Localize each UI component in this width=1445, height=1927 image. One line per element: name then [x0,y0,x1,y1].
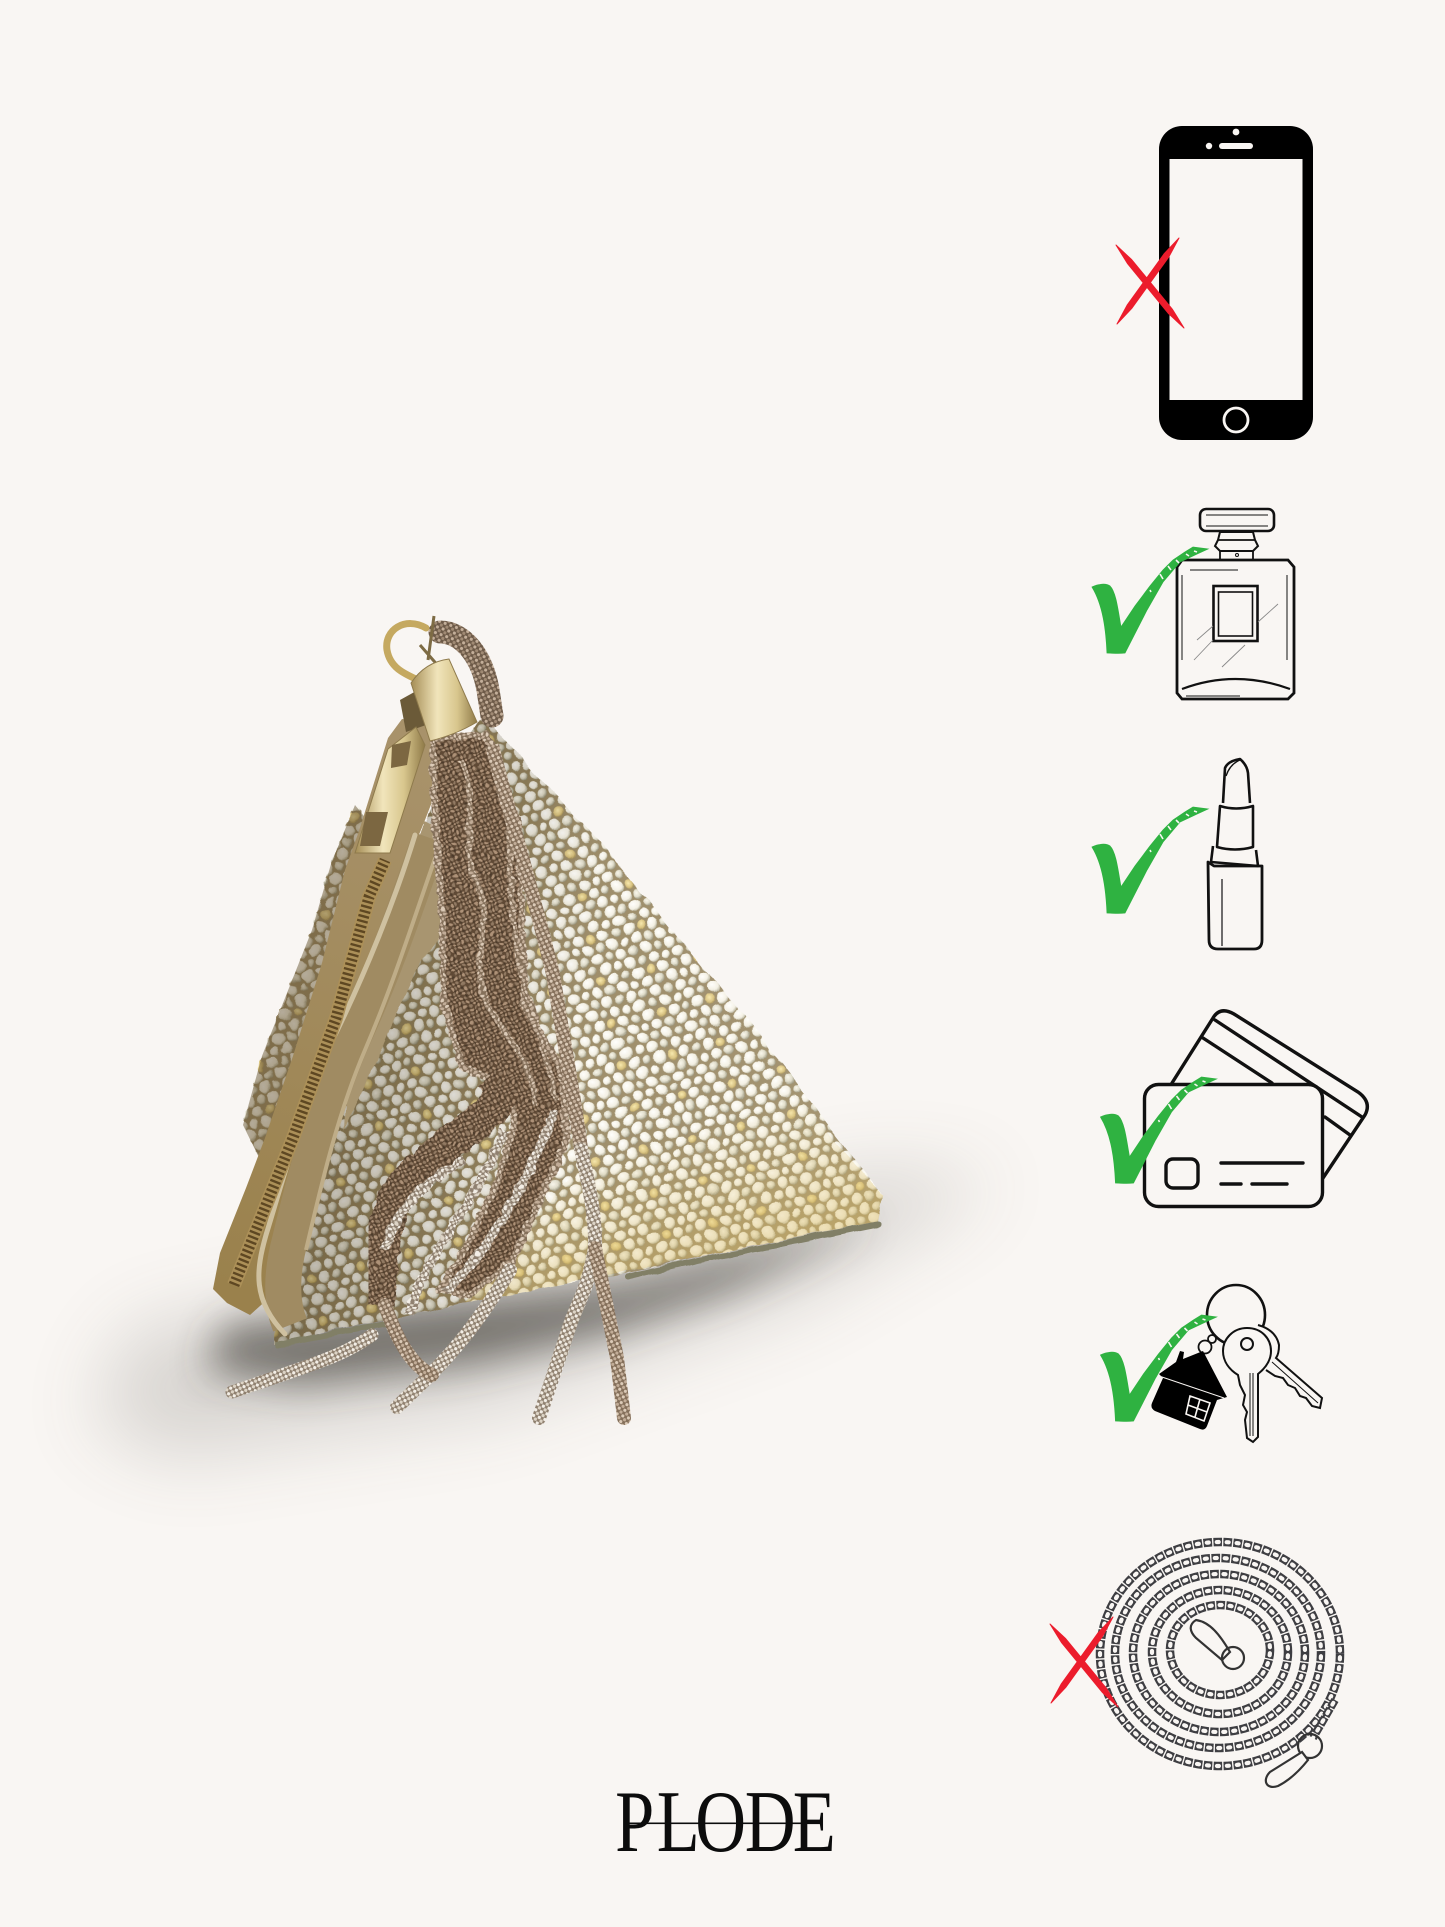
light strand two [410,1130,505,1315]
rope edge [259,835,415,1334]
house fob [1151,1351,1227,1430]
logo: PLODE: PLODE [615,1774,836,1871]
zipper pull tab [400,690,426,732]
bag drop shadow [90,1170,1000,1460]
green check: cards fit [1100,1077,1216,1183]
outer clasp [1266,1734,1322,1787]
house window [1159,1376,1224,1421]
tassel loop strand [385,1305,432,1375]
braid highlight one [460,760,535,1105]
icon: bank cards [1144,1011,1367,1206]
top rope loop [440,632,492,716]
crystal pyramid bag [213,616,883,1418]
gold ring [387,624,426,680]
braid highlight two [500,770,556,1100]
tassel middle strand [397,1270,510,1407]
back crystal sliver [243,805,375,1180]
green check: lipstick fits [1092,807,1208,913]
light strand one [385,1160,465,1250]
lower left braid [378,1075,499,1305]
back key [1258,1325,1322,1408]
red cross: chain not included [1050,1617,1118,1707]
front key groove [1250,1373,1253,1436]
plain velvet patch near zip [345,820,462,1130]
icon: perfume bottle [1177,509,1294,699]
back key groove [1272,1362,1318,1403]
icon: lipstick [1208,759,1262,949]
key hole [1241,1338,1253,1350]
light strand three [445,1110,555,1292]
velvet seam [283,838,430,1325]
front key [1223,1328,1271,1442]
red cross: phone not included [1116,238,1184,328]
green check: keys fit [1100,1315,1216,1421]
green check: perfume fits [1092,547,1208,653]
zipper pull [355,727,425,853]
zipper fabric [213,719,444,1315]
gold glow along base [463,1100,883,1303]
velvet outer light edge [306,850,438,1250]
face shading [274,716,883,1345]
gold ring hook [420,616,440,668]
key ring [1207,1285,1265,1345]
main upper braid and right braid [433,735,567,1295]
tassel left strand [232,1335,372,1392]
tassel braids [378,735,567,1315]
icon: phone [1159,126,1313,440]
tassel long strand two [595,1248,624,1418]
inner clasp [1191,1620,1244,1669]
chain tail [1313,1700,1335,1738]
tassel strand top [492,745,581,1149]
zipper teeth [234,860,385,1285]
icon: house keys [1151,1285,1322,1442]
chain links [1198,1335,1216,1354]
gold tassel cap [411,659,477,741]
tassel long strand one [539,1149,595,1418]
crystal front face [274,716,883,1345]
grey base rim [278,1224,878,1345]
zipper teeth base [234,860,385,1285]
icon: coiled chain [1100,1542,1340,1787]
